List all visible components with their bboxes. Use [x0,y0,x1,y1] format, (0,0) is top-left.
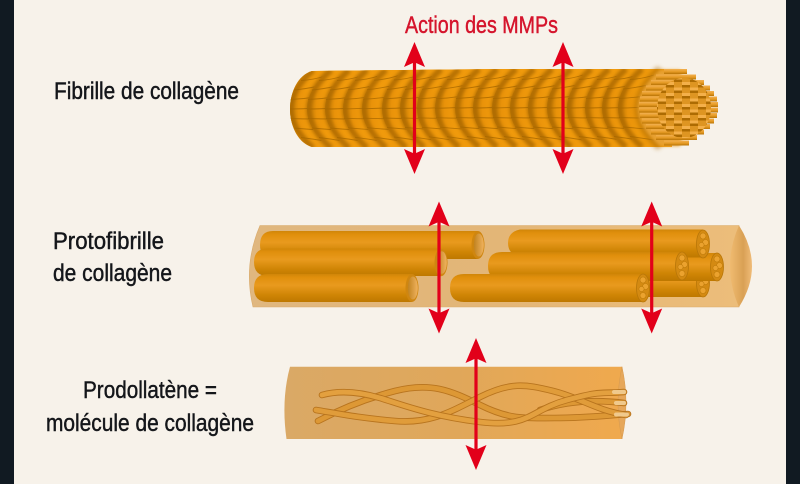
arrow: MMP action on procollagen [466,338,486,470]
envelope open end [730,226,752,307]
left tube 3 [254,274,418,302]
right tube 2 [488,252,688,280]
heading: Action des MMPs: Action des MMPs [405,12,558,39]
arrow: MMP action on fibril, left [404,42,425,174]
envelope end shading [618,367,626,439]
label: Prodollatène = molécule de collagène: molécule de collagène [46,410,254,437]
label: Prodollatène = molécule de collagène [46,377,254,437]
label: Protofibrille de collagène [53,228,172,287]
arrow: MMP action on protofibril, left [428,202,450,334]
label: Protofibrille de collagène: Protofibrille [53,228,164,255]
label: Protofibrille de collagène: de collagène [53,260,172,287]
left tube 1 [260,231,484,259]
left tube 2 [254,248,448,276]
fibril cut end: bundled strands [638,69,718,147]
fibril of collagen [288,68,718,149]
protofibril envelope [249,226,739,307]
right back tube upper [640,253,724,281]
arrow: MMP action on protofibril, right [641,202,662,334]
label: Prodollatène = molécule de collagène: Prodollatène = [83,377,217,404]
right tube 1 [508,230,710,258]
protofibril of collagen [249,226,752,307]
procollagen molecule [284,367,628,439]
arrow: MMP action on fibril, right [552,42,574,174]
right tube 3 [450,274,650,302]
triple helix strands [316,386,628,423]
molecule envelope [284,367,626,439]
right back tube lower [600,269,710,297]
label: Fibrille de collagène: Fibrille de collagène [54,78,239,105]
